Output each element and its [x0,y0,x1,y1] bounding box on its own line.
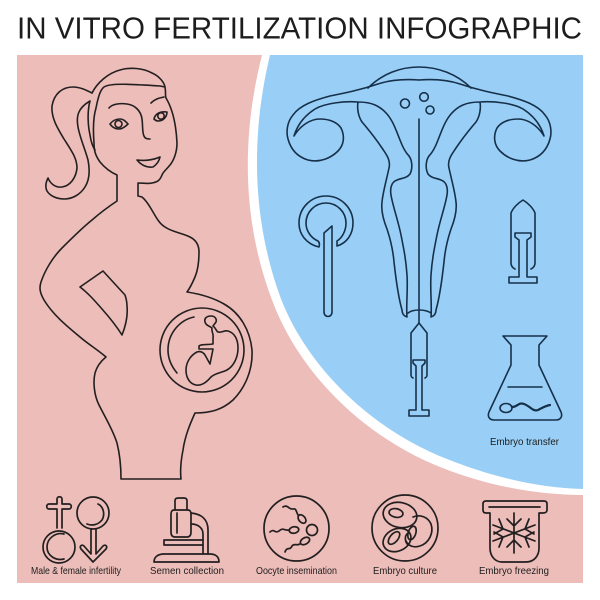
left fallopian tube and ovary [287,80,419,317]
white curved divider [248,55,583,495]
tube [171,510,191,537]
label: male and female infertility: Male & female infertility [31,565,122,577]
rod [324,226,332,316]
flask outline [488,336,562,420]
arm [191,513,208,554]
label: embryo culture: Embryo culture [373,565,437,577]
stage [164,540,203,545]
icon: microscope [154,498,219,562]
body outline [40,68,252,479]
liquid level [508,386,542,388]
right eye [154,112,167,121]
right eyebrow [151,97,164,103]
sperm head [500,404,512,412]
syringe in cervix [409,323,429,416]
lid line [489,506,540,508]
eyepiece [175,498,187,510]
syringe plunger [409,360,429,416]
syringe barrel [411,323,427,378]
fetus [186,316,238,385]
snowflake [493,513,535,553]
right fallopian tube and ovary [419,80,551,317]
arm gap [80,271,127,335]
sperm three [285,544,300,552]
label: embryo freezing: Embryo freezing [479,565,549,577]
mouth [137,157,160,167]
womb circle [160,308,244,392]
eggs [400,99,410,108]
ponytail [46,87,95,199]
catheter line [418,119,420,323]
cross circle symbol [47,497,71,528]
label: oocyte insemination: Oocyte insemination [256,565,337,577]
sperm tail [512,404,550,410]
right half of uterus and tube [419,80,551,317]
left half of uterus and tube [287,80,419,317]
icon: embryo freezing [483,501,547,562]
dish circle [264,496,329,561]
egg cell [306,524,318,536]
icon: embryo transfer syringe [509,200,537,283]
uterine fundus dome [368,67,471,88]
cervix arc [408,310,431,313]
barrel [511,200,535,269]
right cell [406,516,432,547]
top cell [381,499,419,531]
amniotic arc [168,317,194,373]
container lid [483,501,547,562]
dish circle [372,495,438,561]
plunger [509,233,537,283]
icon: oocyte insemination [264,496,329,561]
label: semen collection: Semen collection [150,565,224,577]
sperm one [283,506,298,515]
icon: male and female symbols [43,497,109,563]
eyebrow and nose [109,104,150,139]
uterus diagram [287,67,551,323]
bottom cell [379,524,415,556]
title: IN VITRO FERTILIZATION INFOGRAPHIC [17,10,582,46]
icon: round instrument [299,196,353,316]
base [154,554,219,562]
left eye [110,119,128,129]
arrow circle symbol [77,497,109,529]
double ring [299,196,353,247]
panel: blue background [257,55,583,489]
icon: embryo culture [372,495,438,561]
sperm two [270,529,289,532]
pregnant woman figure [40,68,252,479]
label: embryo transfer: Embryo transfer [490,436,559,448]
icon: flask with embryo [488,336,562,420]
